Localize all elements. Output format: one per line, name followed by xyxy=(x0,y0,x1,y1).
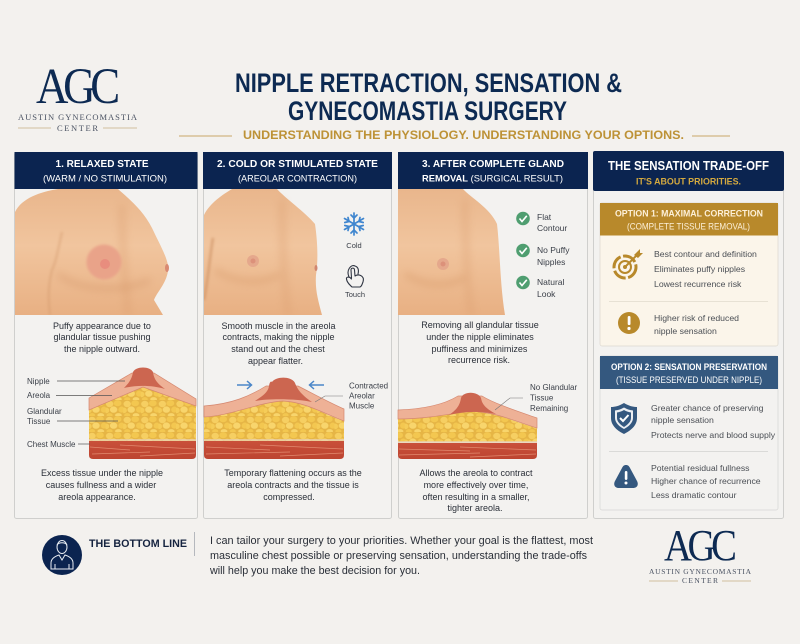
label: contracted areolar muscle: Muscle xyxy=(349,402,375,410)
labels: anatomy: Chest Muscle xyxy=(27,440,76,449)
text: allows the areola xyxy=(419,468,533,513)
text: excess tissue: areola appearance. xyxy=(58,492,136,502)
logo: Austin Gynecomastia Center top: CENTER xyxy=(57,123,98,133)
labels: anatomy: Tissue xyxy=(27,417,51,426)
icon: doctor avatar xyxy=(42,535,82,575)
list: benefits: Eliminates puffy nipples xyxy=(654,264,746,274)
text: allows the areola: tighter areola. xyxy=(447,503,503,513)
arrow: left-pointing compression xyxy=(310,381,324,389)
labels: anatomy xyxy=(27,377,125,449)
bottom line heading: THE BOTTOM LINE xyxy=(89,538,187,550)
logo: Austin Gynecomastia Center top: AUSTIN GYNECOMASTIA xyxy=(18,112,138,122)
photo: post-surgery chest xyxy=(398,189,505,315)
option 1: maximal correction: (COMPLETE TISSUE REMOVAL) xyxy=(627,222,750,232)
list: sensation drawbacks: Less dramatic contour xyxy=(651,490,737,500)
text: removing glandular tissue xyxy=(421,320,539,365)
panel 1 heading xyxy=(43,158,167,184)
text: removing glandular tissue: Removing all glandular tissue xyxy=(421,320,539,330)
text: temporary flattening: Temporary flattening occurs as the xyxy=(224,468,362,478)
panel 4 heading: THE SENSATION TRADE-OFF xyxy=(608,159,769,173)
checklist: results: Flat xyxy=(537,212,552,222)
panel 2 heading: 2. COLD OR STIMULATED STATE xyxy=(217,158,378,170)
logo: Austin Gynecomastia Center bottom xyxy=(649,521,752,585)
logo: Austin Gynecomastia Center top xyxy=(18,58,138,133)
text: removing glandular tissue: under the nipple eliminates xyxy=(426,332,534,342)
icon: exclamation circle xyxy=(618,312,640,334)
icon: touch hand xyxy=(346,266,363,287)
list: sensation benefits xyxy=(651,403,776,440)
panel: the sensation trade-off xyxy=(593,151,784,518)
option 1: maximal correction: OPTION 1: MAXIMAL CORRECTION xyxy=(615,208,763,220)
option 2: sensation preservation xyxy=(600,356,778,510)
text: smooth muscle: appear flatter. xyxy=(248,356,303,366)
logo: Austin Gynecomastia Center bottom: AUSTIN GYNECOMASTIA xyxy=(649,567,752,576)
text: smooth muscle xyxy=(221,321,336,366)
text: puffy appearance: the nipple outward. xyxy=(64,344,140,354)
panel 2 heading xyxy=(217,158,378,184)
panel: 2 cold or stimulated state xyxy=(203,152,392,518)
text: excess tissue: Excess tissue under the nipple xyxy=(41,468,163,478)
text: smooth muscle: contracts, making the nipple xyxy=(222,332,335,342)
label: cold: Cold xyxy=(346,241,362,250)
checklist: results: Look xyxy=(537,289,556,299)
cross-section diagram 2 xyxy=(204,378,344,459)
panel 3 heading: REMOVAL (SURGICAL RESULT) xyxy=(422,174,563,184)
logo: Austin Gynecomastia Center bottom: AGC xyxy=(664,521,735,570)
checklist: results: No Puffy xyxy=(537,245,570,255)
text: smooth muscle: Smooth muscle in the areola xyxy=(221,321,336,331)
text: smooth muscle: stand out and the chest xyxy=(231,344,325,354)
icon: shield xyxy=(611,403,637,434)
list: sensation drawbacks xyxy=(651,463,761,500)
text: puffy appearance xyxy=(53,321,151,354)
labels: anatomy: Areola xyxy=(27,391,51,400)
panel 1 heading: (WARM / NO STIMULATION) xyxy=(43,174,167,184)
list: benefits: Lowest recurrence risk xyxy=(654,279,742,289)
label: contracted areolar muscle: Contracted xyxy=(349,382,388,390)
list: sensation benefits: nipple sensation xyxy=(651,415,714,425)
list: sensation benefits: Greater chance of preserving xyxy=(651,403,764,413)
list: risk: Higher risk of reduced xyxy=(654,313,739,323)
text: excess tissue xyxy=(41,468,163,502)
label: contracted areolar muscle: Areolar xyxy=(349,392,375,400)
checklist: results: Contour xyxy=(537,223,567,233)
bottom line text: will help you make the best decision for you. xyxy=(209,565,420,577)
list: benefits: Best contour and definition xyxy=(654,249,757,259)
text: removing glandular tissue: recurrence risk. xyxy=(448,355,510,365)
text: temporary flattening: compressed. xyxy=(263,492,315,502)
list: sensation benefits: Protects nerve and blood supply xyxy=(651,430,776,440)
text: removing glandular tissue: puffiness and minimizes xyxy=(432,344,528,354)
panel 4 heading xyxy=(608,159,769,188)
label: no glandular tissue remaining: Remaining xyxy=(530,404,568,413)
list: risk xyxy=(654,313,739,336)
photo: flat chest xyxy=(204,189,322,315)
text: puffy appearance: Puffy appearance due to xyxy=(53,321,151,331)
icon: target xyxy=(614,249,643,278)
bottom line text: masculine chest possible or preserving sensation, understanding the trade-offs xyxy=(210,550,587,562)
bottom line text xyxy=(209,535,593,577)
title: NIPPLE RETRACTION, SENSATION & xyxy=(235,68,622,98)
checklist: results: Natural xyxy=(537,277,565,287)
panel 1 heading: 1. RELAXED STATE xyxy=(56,158,148,170)
panel 2 heading: (AREOLAR CONTRACTION) xyxy=(238,174,357,184)
title: GYNECOMASTIA SURGERY xyxy=(288,96,567,126)
text: allows the areola: more effectively over time, xyxy=(424,480,528,490)
title xyxy=(235,68,622,126)
arrow: right-pointing compression xyxy=(237,381,252,389)
icon: warning triangle xyxy=(614,465,638,488)
text: puffy appearance: glandular tissue pushing xyxy=(53,332,151,342)
text: temporary flattening xyxy=(224,468,362,502)
text: temporary flattening: areola contracts and the tissue is xyxy=(227,480,359,490)
list: risk: nipple sensation xyxy=(654,326,717,336)
label: no glandular tissue remaining: No Glandular xyxy=(530,383,577,392)
option 2: sensation preservation: OPTION 2: SENSATION PRESERVATION xyxy=(611,362,767,373)
icon: snowflake xyxy=(344,213,364,235)
list: benefits xyxy=(654,249,757,289)
text: allows the areola: often resulting in a smaller, xyxy=(422,492,530,502)
label: contracted areolar muscle xyxy=(315,382,388,410)
list: sensation drawbacks: Potential residual fullness xyxy=(651,463,750,473)
label: no glandular tissue remaining: Tissue xyxy=(530,394,554,402)
panel: 3 after complete gland removal xyxy=(398,152,588,518)
text: excess tissue: causes fullness and a wider xyxy=(46,480,156,490)
panel 4 heading: IT'S ABOUT PRIORITIES. xyxy=(636,176,741,188)
labels: anatomy: Nipple xyxy=(27,377,50,386)
cross-section diagram 1 xyxy=(89,368,196,459)
label: touch: Touch xyxy=(345,290,365,299)
list: sensation drawbacks: Higher chance of recurrence xyxy=(651,476,761,486)
option 2: sensation preservation: (TISSUE PRESERVED UNDER NIPPLE) xyxy=(616,375,762,386)
checklist: results xyxy=(516,212,570,299)
text: allows the areola: Allows the areola to contract xyxy=(419,468,533,478)
subtitle: UNDERSTANDING THE PHYSIOLOGY. UNDERSTANDING YOUR OPTIONS. xyxy=(243,130,684,142)
labels: anatomy: Glandular xyxy=(27,407,62,416)
panel 3 heading: 3. AFTER COMPLETE GLAND xyxy=(422,158,564,170)
label: no glandular tissue remaining xyxy=(495,383,577,413)
logo: Austin Gynecomastia Center bottom: CENTER xyxy=(682,576,718,585)
bottom line text: I can tailor your surgery to your priorities. Whether your goal is the flattest, most xyxy=(210,535,593,547)
panel: 1 relaxed state xyxy=(14,152,198,518)
logo: Austin Gynecomastia Center top: AGC xyxy=(36,58,118,115)
cross-section diagram 3 xyxy=(398,393,537,459)
photo: puffy chest xyxy=(15,189,169,315)
panel 3 heading xyxy=(422,158,564,184)
checklist: results: Nipples xyxy=(537,257,565,267)
option 1: maximal correction xyxy=(600,203,778,346)
